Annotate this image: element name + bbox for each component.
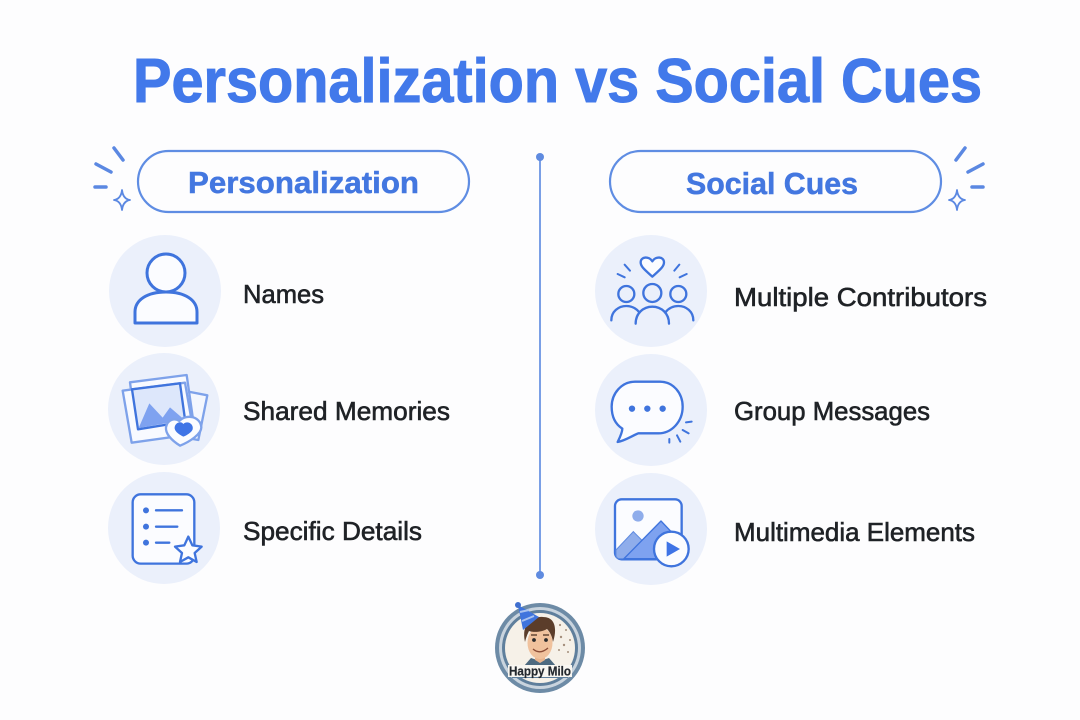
item: Names: Names [243, 279, 324, 309]
center divider [536, 153, 544, 579]
heading pill: Social Cues: Social Cues [686, 166, 858, 201]
item: Multimedia Elements: Multimedia Elements [734, 517, 975, 547]
item: Multimedia Elements [595, 473, 975, 585]
item: Specific Details [108, 472, 422, 584]
banner: Happy Milo [509, 664, 571, 678]
icon: photos with heart [123, 375, 207, 446]
icon: sparkle right [949, 148, 983, 210]
icon: speech bubble [612, 382, 692, 443]
item: Specific Details: Specific Details [243, 516, 422, 546]
item: Group Messages: Group Messages [734, 396, 930, 426]
icon: image with play button [615, 499, 689, 566]
panel: social cues [595, 148, 987, 585]
character [524, 617, 556, 666]
party hat [515, 602, 539, 630]
heading pill: Social Cues [610, 151, 941, 212]
icon: list with star [133, 494, 202, 564]
item: Group Messages [595, 354, 930, 466]
item: Shared Memories [108, 353, 450, 465]
panel: personalization [95, 148, 469, 584]
item: Multiple Contributors: Multiple Contributors [734, 282, 987, 312]
item: Shared Memories: Shared Memories [243, 396, 450, 426]
item: Names [109, 235, 324, 347]
icon: sparkle left [95, 148, 130, 210]
heading pill: Personalization: Personalization [188, 165, 419, 200]
icon: person [135, 254, 197, 323]
item: Multiple Contributors [595, 235, 987, 347]
icon: group with heart [611, 258, 693, 324]
title: Personalization vs Social Cues [133, 47, 982, 116]
confetti [558, 624, 571, 653]
heading pill: Personalization [138, 151, 469, 212]
logo: Happy Milo badge [495, 602, 585, 693]
